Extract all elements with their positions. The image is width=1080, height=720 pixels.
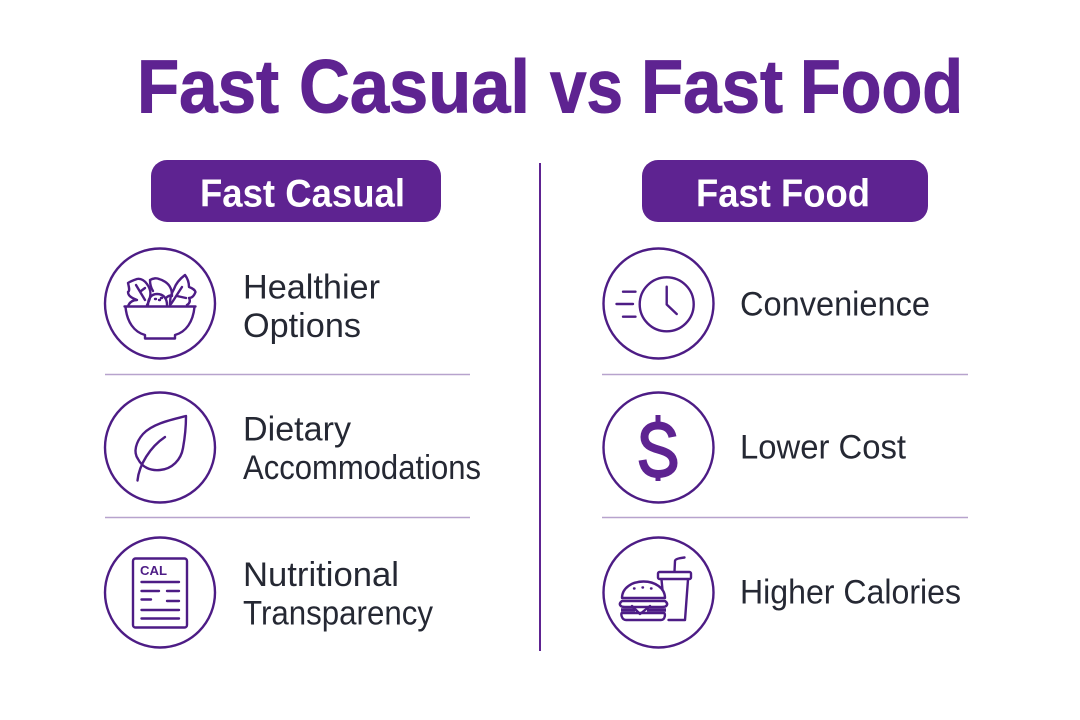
label: nutritional transparency: Transparency <box>243 594 433 632</box>
title: Fast <box>137 44 279 128</box>
label: nutritional transparency: Nutritional <box>243 556 399 594</box>
label: dietary accommodations <box>243 410 481 487</box>
title: Food <box>800 44 963 128</box>
label: healthier options: Options <box>243 307 361 345</box>
label: nutritional transparency <box>243 556 433 632</box>
icon: nutrition label: CAL <box>140 564 167 578</box>
icon: fast clock <box>604 248 714 358</box>
icon: salad bowl <box>105 248 215 358</box>
label: higher calories: Higher Calories <box>740 574 961 612</box>
label: convenience: Convenience <box>740 286 930 324</box>
icon: dollar sign <box>604 392 714 502</box>
title <box>137 44 963 128</box>
icon: nutrition label <box>105 538 215 648</box>
heading: fast food: Fast Food <box>696 172 870 216</box>
heading: fast food <box>642 160 928 222</box>
title: vs <box>550 44 623 128</box>
heading: fast casual: Fast Casual <box>200 172 405 216</box>
label: dietary accommodations: Dietary <box>243 410 351 448</box>
icon: burger and drink <box>604 538 714 648</box>
label: dietary accommodations: Accommodations <box>243 449 481 487</box>
panel: fast food <box>602 160 968 648</box>
label: healthier options: Healthier <box>243 268 380 306</box>
label: lower cost: Lower Cost <box>740 428 907 466</box>
panel: fast casual <box>105 160 481 648</box>
title: Fast <box>641 44 783 128</box>
label: healthier options <box>243 268 380 345</box>
heading: fast casual <box>151 160 441 222</box>
icon: leaf <box>105 392 215 502</box>
center divider <box>539 163 541 651</box>
title: Casual <box>299 44 530 128</box>
